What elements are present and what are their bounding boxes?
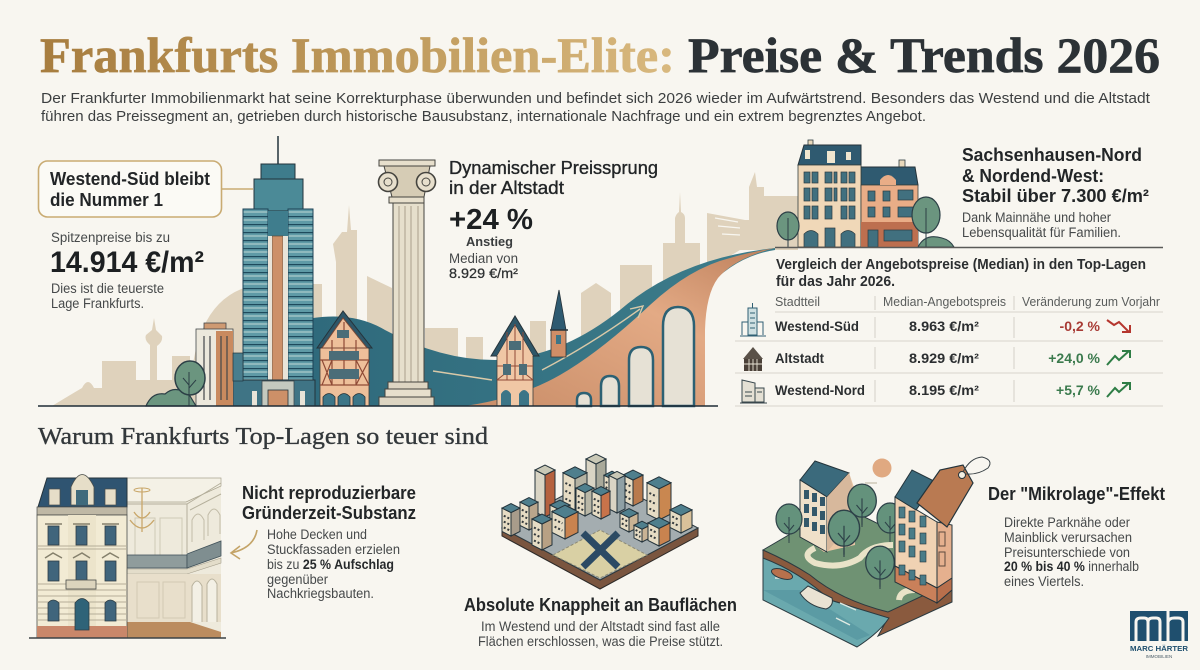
logo	[1130, 611, 1189, 659]
logo: MARC HÄRTER	[1130, 644, 1189, 653]
intro text: Der Frankfurter Immobilienmarkt hat seine Korrekturphase überwunden und befindet sich 2026 wieder im Aufwärtstrend. Besonders das Westend und die Altstadt	[41, 91, 1150, 107]
text: Gründerzeit: Stuckfassaden erzielen	[267, 542, 400, 557]
text: Sachsenhausen	[962, 145, 1149, 240]
balcony	[127, 555, 187, 568]
text: Sachsenhausen: Sachsenhausen-Nord	[962, 145, 1142, 165]
text: Sachsenhausen: & Nordend-West:	[962, 166, 1104, 186]
row: Westend-Süd: Westend-Süd	[775, 318, 859, 334]
callout: Westend-Süd: die Nummer 1	[50, 190, 163, 210]
soil	[763, 550, 952, 636]
stat: Spitzenpreise: Spitzenpreise bis zu	[51, 230, 170, 245]
price tag	[917, 465, 973, 527]
text: Gründerzeit: gegenüber	[267, 572, 328, 587]
illustration: isometric city	[502, 454, 698, 589]
copper viaduct	[465, 248, 775, 406]
text: Mikrolage	[988, 484, 1165, 589]
tree and bush	[146, 361, 205, 406]
stat: Altstadt: 8.929 €/m²	[449, 266, 519, 281]
timber house left	[317, 311, 372, 406]
text: Mikrolage: Mainblick verursachen	[1004, 530, 1132, 545]
background skyline	[52, 172, 798, 406]
section heading: Warum Frankfurts Top-Lagen so teuer sind	[38, 424, 488, 450]
text: Gründerzeit: Nicht reproduzierbare	[242, 483, 416, 503]
stat: Altstadt: Median von	[449, 251, 518, 266]
text: Mikrolage: 20 % bis 40 % innerhalb	[1004, 559, 1139, 574]
stat: Spitzenpreise	[50, 230, 204, 311]
row: Westend-Nord: 8.195 €/m²	[909, 382, 979, 398]
row: Altstadt	[743, 347, 1130, 371]
arrow: Gründerzeit	[231, 530, 257, 559]
stat: Altstadt	[449, 158, 658, 281]
text: Gründerzeit: bis zu 25 % Aufschlag	[267, 557, 394, 572]
row: Altstadt: Altstadt	[775, 350, 824, 366]
text: Gründerzeit: Gründerzeit-Substanz	[242, 503, 416, 523]
text: Gründerzeit: Nachkriegsbauten.	[267, 586, 374, 601]
hero skyline illustration	[52, 136, 798, 406]
sun	[872, 458, 892, 478]
text: Knappheit: Absolute Knappheit an Bauflächen	[464, 595, 737, 615]
text: Sachsenhausen: Lebensqualität für Familien.	[962, 225, 1121, 240]
text: Sachsenhausen: Dank Mainnähe und hoher	[962, 210, 1111, 225]
teal hill and ribbon	[313, 248, 775, 406]
comparison table: Median-Angebotspreis	[883, 295, 1006, 309]
chandelier	[130, 488, 154, 532]
comparison table: Stadtteil	[775, 295, 820, 309]
title: Preise & Trends 2026	[688, 27, 1160, 83]
column	[378, 160, 436, 406]
path	[808, 545, 893, 566]
row: Westend-Nord: Westend-Nord	[775, 382, 865, 398]
houses Sachsenhausen	[777, 140, 954, 247]
table heading: für das Jahr 2026.	[776, 274, 895, 290]
text: Mikrolage: Direkte Parknähe oder	[1004, 515, 1130, 530]
callout: Westend-Süd: Westend-Süd bleibt	[50, 169, 210, 189]
text: Mikrolage: Preisunterschiede von	[1004, 545, 1130, 560]
boats	[770, 566, 794, 582]
stat: Spitzenpreise: Dies ist die teuerste	[51, 281, 164, 296]
callout: Westend-Süd	[38, 161, 253, 217]
text: Knappheit: Flächen erschlossen, was die Preise stützt.	[478, 634, 723, 649]
comparison table	[735, 295, 1163, 406]
text: Gründerzeit	[242, 483, 416, 601]
building left	[800, 461, 855, 552]
intro text: führen das Preissegment an, getrieben durch historische Bausubstanz, internationale Nachfrage und ein extrem begrenztes Angebot.	[41, 109, 926, 125]
river	[763, 558, 889, 647]
facade	[38, 478, 127, 507]
text: Knappheit	[464, 595, 737, 649]
text: Gründerzeit: Hohe Decken und	[267, 527, 367, 542]
table heading	[776, 257, 1146, 290]
illustration: Gründerzeit building	[29, 474, 226, 638]
row: Westend-Süd: -0,2 %	[1060, 318, 1101, 334]
row: Westend-Nord	[740, 380, 1130, 403]
trend arrow on ribbon	[433, 306, 643, 380]
table heading: Vergleich der Angebotspreise (Median) in den Top-Lagen	[776, 257, 1146, 273]
row: Westend-Süd	[740, 303, 1130, 336]
text: Knappheit: Im Westend und der Altstadt sind fast alle	[481, 619, 720, 634]
timber house and church	[491, 290, 568, 406]
text: Sachsenhausen: Stabil über 7.300 €/m²	[962, 186, 1149, 206]
illustration: Mikrolage scene	[763, 457, 990, 647]
title: Frankfurts Immobilien-Elite:	[40, 27, 675, 83]
stat: Spitzenpreise: 14.914 €/m²	[50, 246, 204, 279]
grass	[763, 505, 952, 612]
row: Altstadt: 8.929 €/m²	[909, 350, 979, 366]
row: Westend-Süd: 8.963 €/m²	[909, 318, 979, 334]
building right	[895, 497, 937, 588]
row: Westend-Nord: +5,7 %	[1056, 382, 1101, 398]
rule under houses	[775, 246, 1163, 248]
trees	[848, 484, 876, 527]
stat: Spitzenpreise: Lage Frankfurts.	[51, 296, 144, 311]
stat: Altstadt: Dynamischer Preissprung	[449, 158, 658, 178]
text: Mikrolage: eines Viertels.	[1004, 574, 1084, 589]
logo: IMMOBILIEN	[1146, 654, 1172, 659]
stat: Altstadt: Anstieg	[466, 234, 513, 249]
interior	[127, 478, 221, 638]
ground line hero	[38, 405, 718, 407]
row: Altstadt: +24,0 %	[1048, 350, 1101, 366]
stat: Altstadt: +24 %	[449, 204, 533, 236]
stat: Altstadt: in der Altstadt	[449, 178, 564, 198]
highrise	[233, 136, 315, 406]
title	[40, 27, 1160, 83]
comparison table: Veränderung zum Vorjahr	[1022, 295, 1160, 309]
small office building	[196, 323, 243, 406]
intro text	[41, 91, 1150, 125]
text: Mikrolage: Der "Mikrolage"-Effekt	[988, 484, 1165, 504]
